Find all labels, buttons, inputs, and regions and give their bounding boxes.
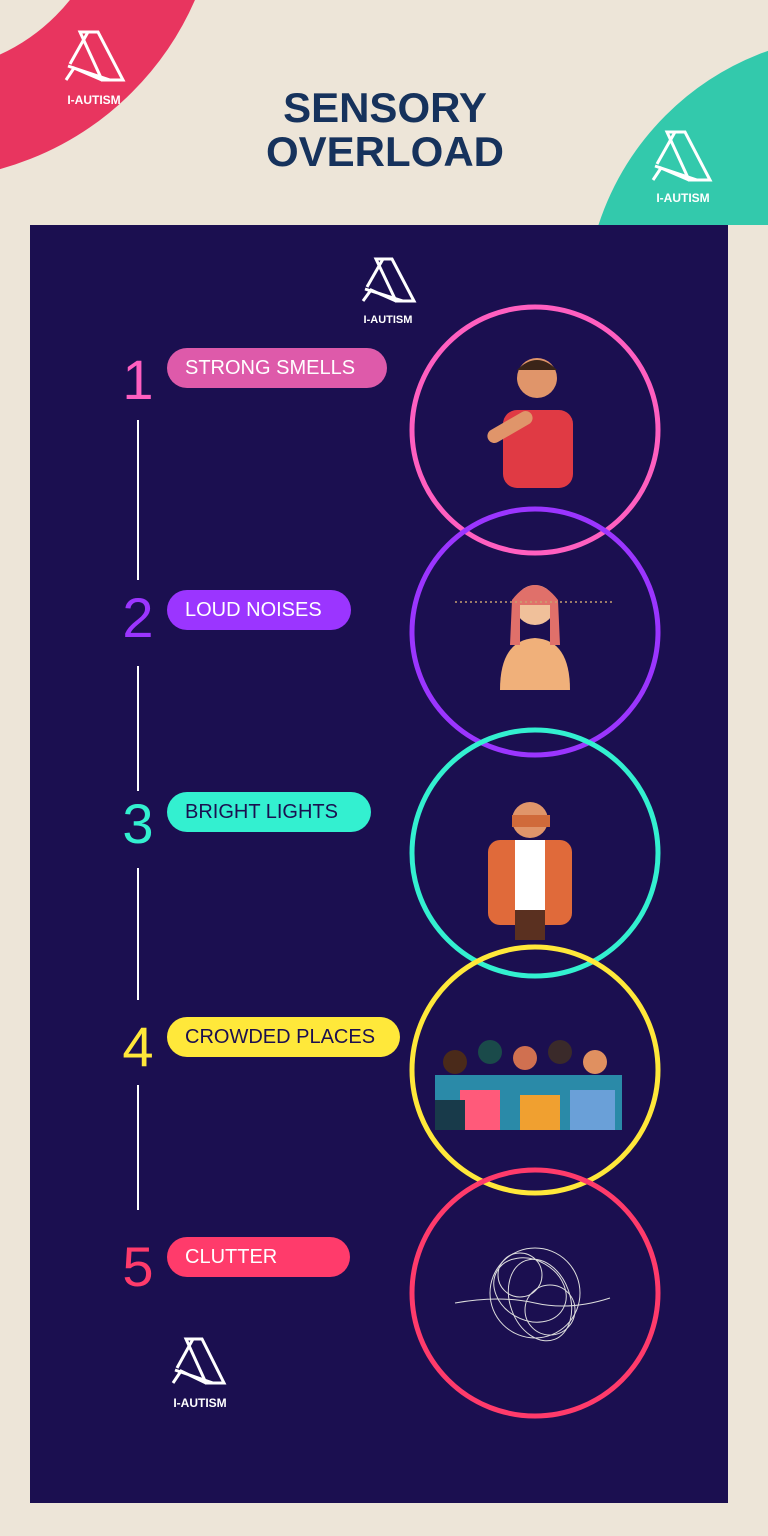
title [266, 84, 504, 175]
circle 4: crowd [412, 947, 658, 1193]
pill 3: BRIGHT LIGHTS [185, 801, 338, 823]
number 5: 5 [122, 1235, 154, 1298]
item 3 [122, 792, 371, 855]
pill 5: CLUTTER [185, 1246, 277, 1268]
pill 2 [167, 590, 351, 630]
logo panel top: I-AUTISM [364, 314, 412, 326]
circle 1: smells [412, 307, 658, 553]
pill 1: STRONG SMELLS [185, 357, 355, 379]
circles with illustrations [410, 304, 660, 1418]
pill 4: CROWDED PLACES [185, 1026, 375, 1048]
timeline lines [137, 420, 139, 580]
logo top-left [64, 30, 126, 107]
logo panel top [362, 258, 416, 326]
circle 5: clutter [412, 1170, 658, 1416]
title: OVERLOAD [266, 128, 504, 175]
pill 3 [167, 792, 371, 832]
number 2: 2 [122, 586, 154, 649]
panel [30, 225, 728, 1503]
decorative arcs [0, 0, 768, 225]
item 4 [122, 1015, 400, 1078]
number 1: 1 [122, 348, 154, 411]
number 4: 4 [122, 1015, 154, 1078]
logo panel bottom [172, 1338, 227, 1410]
pill 2: LOUD NOISES [185, 599, 322, 621]
logo top-right: I-AUTISM [656, 191, 710, 205]
logo top-right [652, 130, 712, 205]
title: SENSORY [283, 84, 487, 131]
number 3: 3 [122, 792, 154, 855]
item 2 [122, 586, 351, 649]
circle 2: noises [412, 509, 658, 755]
item 5 [122, 1235, 350, 1298]
logo top-left: I-AUTISM [67, 93, 121, 107]
pill 5 [167, 1237, 350, 1277]
logo panel bottom: I-AUTISM [173, 1396, 227, 1410]
pill 4 [167, 1017, 400, 1057]
circle 3: lights [412, 730, 658, 976]
pill 1 [167, 348, 387, 388]
item 1 [122, 348, 387, 411]
